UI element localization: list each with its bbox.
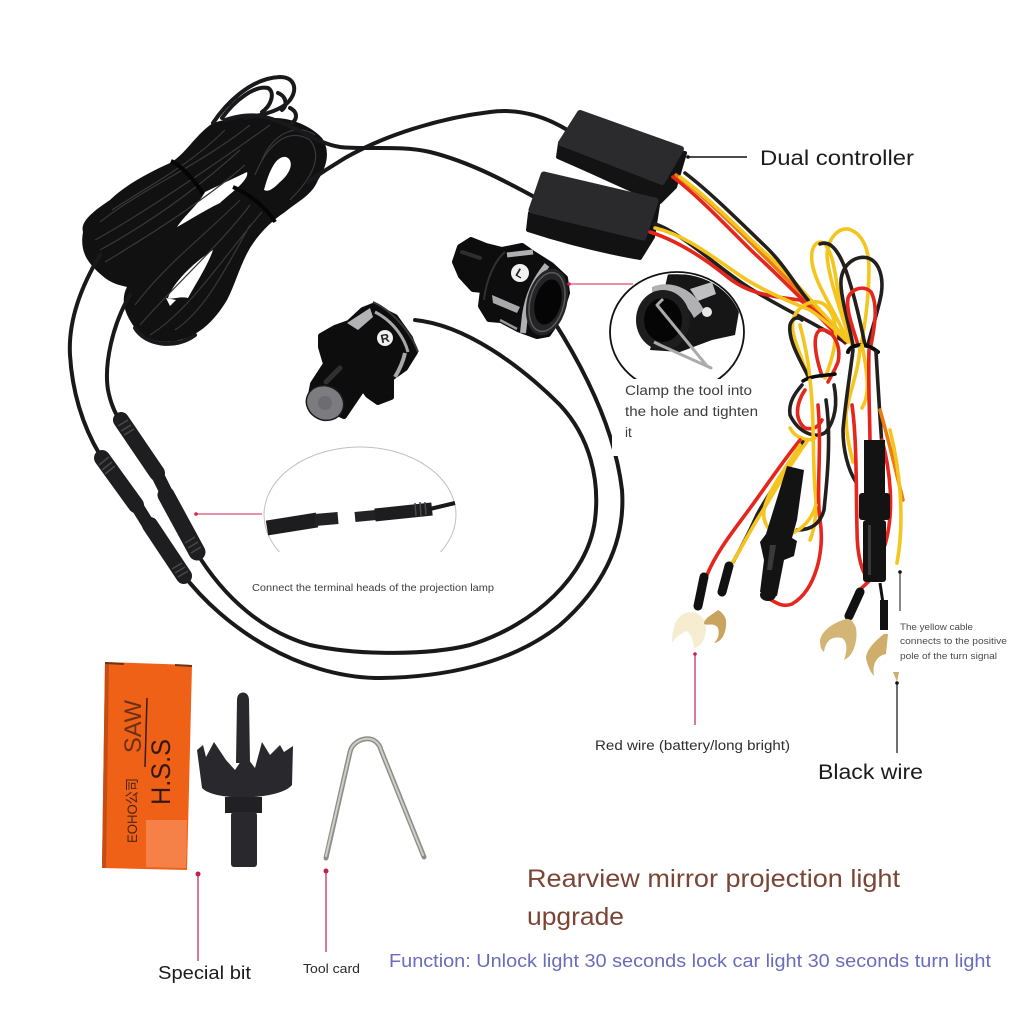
- cluster 2 lower strands: [810, 380, 816, 540]
- title: upgrade: [527, 903, 624, 931]
- saw box: H.S.S: [146, 739, 176, 805]
- inline connectors: [99, 420, 201, 577]
- title: Rearview mirror projection light: [527, 865, 900, 893]
- label: special bit: Special bit: [158, 963, 251, 983]
- label: yellow cable: The yellow cable: [900, 622, 973, 633]
- label: clamp the tool: it: [625, 425, 632, 440]
- function description: Function: Unlock light 30 seconds lock car light 30 seconds turn light: [389, 950, 991, 971]
- pointer: terminal connection: [194, 512, 262, 516]
- pointer: yellow cable: [898, 570, 902, 611]
- lamp: R: [301, 302, 418, 426]
- saw box: SAW: [120, 700, 147, 753]
- pointer: tool card: [324, 868, 328, 952]
- label: yellow cable: [900, 622, 1007, 662]
- callout: clamp tool circle: [609, 271, 745, 379]
- label: dual controller: Dual controller: [760, 147, 914, 170]
- pointer: dual controller: [686, 155, 747, 159]
- label: red wire: Red wire (battery/long bright): [595, 738, 790, 753]
- pointer: lamp hole: [567, 282, 633, 286]
- cluster 1 lower strands: [846, 348, 860, 462]
- lamp label: R: [377, 330, 393, 346]
- second cluster loops: [792, 302, 836, 378]
- saw box: [102, 662, 192, 870]
- saw box: EOHO公司: [124, 778, 140, 843]
- controller wires to upper tie: [676, 175, 847, 342]
- pointer: black wire: [895, 681, 899, 753]
- lamp label: L: [511, 264, 529, 282]
- fuse holder: left: [760, 466, 804, 601]
- coloured wire harness: [650, 173, 903, 605]
- pointer: red wire: [693, 652, 697, 725]
- label: clamp the tool: Clamp the tool into: [625, 383, 752, 398]
- hole saw bit: [197, 692, 293, 867]
- cable coil: [82, 77, 327, 344]
- label: yellow cable: connects to the positive: [900, 636, 1007, 647]
- title: [527, 865, 900, 931]
- black cables: [70, 111, 622, 678]
- label: clamp the tool: the hole and tighten: [625, 404, 758, 419]
- label: clamp the tool: [625, 383, 758, 440]
- white label patch: [888, 612, 1012, 672]
- lamp: L: [455, 240, 575, 340]
- lamp label: R: R: [379, 331, 391, 346]
- label: black wire: Black wire: [818, 761, 923, 784]
- controller: upper: [558, 113, 685, 202]
- callout: terminal connection circle: [264, 446, 456, 552]
- label: tool card: Tool card: [303, 962, 360, 976]
- tool card: [326, 739, 424, 858]
- pointer: special bit: [196, 872, 200, 961]
- cable ties: [171, 161, 275, 222]
- white text patch: [612, 428, 626, 456]
- fork terminals: [672, 566, 899, 682]
- lamp label: L: L: [513, 266, 526, 281]
- label: connect terminal heads: Connect the terminal heads of the projection lamp: [252, 582, 494, 594]
- controller: lower: [528, 175, 658, 258]
- upper tie: [848, 345, 878, 352]
- fuse holder: right: [859, 440, 890, 582]
- upper loops: [812, 242, 852, 345]
- label: yellow cable: pole of the turn signal: [900, 651, 997, 662]
